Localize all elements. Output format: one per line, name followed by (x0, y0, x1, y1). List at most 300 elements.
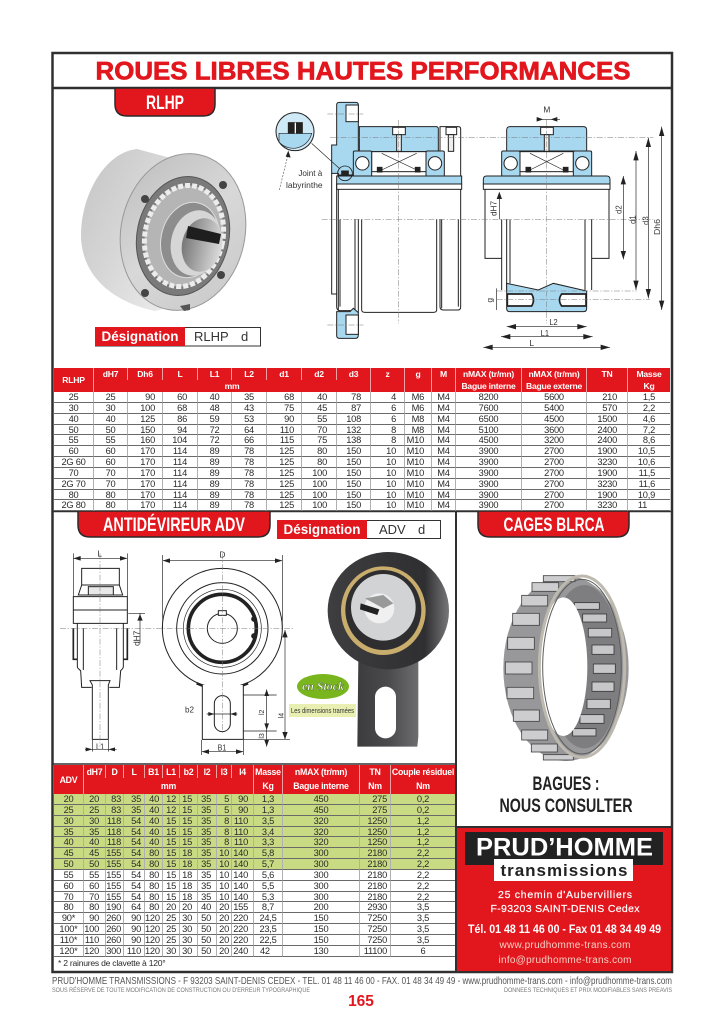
front view (162, 568, 282, 739)
ADV dimensions: l4 (278, 713, 285, 718)
table: RLHP dimensions: mm (225, 381, 239, 391)
table: ADV dimensions: 3,5 (417, 924, 429, 934)
table: ADV dimensions: 50 (89, 859, 99, 869)
table: ADV dimensions: 15 (182, 794, 192, 804)
table: ADV dimensions: 2,2 (417, 859, 429, 869)
table: ADV dimensions: 2180 (367, 881, 387, 891)
table: RLHP dimensions: 170 (140, 468, 155, 478)
table: ADV dimensions: 15 (166, 848, 176, 858)
table: RLHP dimensions: M (440, 369, 447, 379)
table: RLHP dimensions: 80 (69, 490, 78, 500)
table: RLHP dimensions: M6 (412, 392, 424, 402)
table: ADV dimensions: 7250 (367, 924, 387, 934)
table: ADV dimensions: 155 (106, 881, 121, 891)
table: ADV dimensions: 55 (89, 870, 99, 880)
table: RLHP dimensions: M4 (437, 425, 450, 435)
table: ADV dimensions: 0,2 (417, 794, 429, 804)
table: ADV dimensions: 155 (233, 902, 248, 912)
table: ADV dimensions: 90 (89, 913, 99, 923)
table: RLHP dimensions: 40 (69, 414, 78, 424)
table: ADV dimensions: 120 (145, 924, 160, 934)
table: ADV dimensions: 5 (224, 805, 229, 815)
table: ADV dimensions: 7250 (367, 935, 387, 945)
table: ADV dimensions: 1,3 (262, 805, 274, 815)
table: RLHP dimensions: 115 (280, 435, 294, 445)
table: RLHP dimensions: d2 (314, 369, 324, 379)
table: ADV dimensions: 260 (106, 913, 121, 923)
table: RLHP dimensions: 89 (210, 490, 219, 500)
table: RLHP dimensions: 40 (106, 414, 115, 424)
table: ADV dimensions: 320 (314, 816, 328, 826)
table: RLHP dimensions: 10 (386, 468, 396, 478)
table: ADV dimensions: 40 (64, 837, 73, 847)
table: RLHP dimensions: 108 (346, 414, 361, 424)
table: ADV dimensions: 30 (89, 816, 99, 826)
table: RLHP dimensions: 55 (106, 435, 115, 445)
table: ADV dimensions: 3,5 (417, 935, 429, 945)
table: RLHP dimensions: 2G 70 (61, 479, 86, 489)
table: ADV dimensions: 15 (182, 805, 192, 815)
table: ADV dimensions: 30 (64, 816, 73, 826)
dimension arrows: d2 (613, 205, 623, 214)
table: ADV dimensions: 35 (201, 870, 211, 880)
table: ADV dimensions: 2180 (367, 859, 387, 869)
table: RLHP dimensions: 1,5 (643, 392, 655, 402)
table: ADV dimensions: 10 (219, 892, 229, 902)
table: RLHP dimensions: 5600 (544, 392, 564, 402)
table: ADV dimensions: 450 (314, 794, 328, 804)
table: RLHP dimensions: 170 (140, 500, 155, 510)
table: RLHP dimensions: 66 (244, 435, 254, 445)
table: RLHP dimensions: 68 (284, 392, 294, 402)
designation box: ADV d (277, 520, 440, 539)
table: ADV dimensions: 20 (166, 902, 176, 912)
table: ADV dimensions: 260 (106, 935, 121, 945)
table: RLHP dimensions: 2400 (597, 435, 617, 445)
table: ADV dimensions: l2 (204, 766, 210, 776)
table: ADV dimensions: 6 (421, 946, 425, 956)
table: ADV dimensions: 50 (201, 935, 211, 945)
table: ADV dimensions: 3,5 (417, 913, 429, 923)
table: ADV dimensions: 100* (59, 924, 78, 934)
table: RLHP dimensions: Bague interne (461, 381, 516, 391)
table: ADV dimensions: 110 (127, 946, 141, 956)
table: RLHP dimensions: 150 (346, 457, 361, 467)
ADV dimensions: b2 (185, 705, 194, 715)
table: ADV dimensions: 130 (314, 946, 328, 956)
table: RLHP dimensions: M4 (437, 414, 450, 424)
table: ADV dimensions: 22,5 (259, 935, 277, 945)
table: RLHP dimensions: 94 (177, 425, 187, 435)
table: RLHP dimensions: 48 (210, 403, 219, 413)
table: ADV dimensions (54, 765, 455, 968)
table: ADV dimensions: 450 (314, 805, 328, 815)
table: RLHP dimensions: 114 (173, 490, 187, 500)
table: RLHP dimensions: 89 (210, 446, 219, 456)
table: ADV dimensions: 15 (182, 816, 192, 826)
table: RLHP dimensions: 150 (346, 479, 361, 489)
table: ADV dimensions: 60 (64, 881, 73, 891)
table: ADV dimensions: 90 (238, 794, 248, 804)
table: RLHP dimensions: 78 (244, 457, 254, 467)
table: ADV dimensions: 275 (372, 805, 387, 815)
table: ADV dimensions: 140 (233, 892, 248, 902)
designation box: RLHP d: Désignation (102, 329, 178, 344)
table: ADV dimensions: 80 (149, 902, 159, 912)
table: RLHP dimensions: 80 (106, 490, 115, 500)
table: ADV dimensions: 90 (131, 913, 141, 923)
table: RLHP dimensions: 90 (284, 414, 294, 424)
table: ADV dimensions: 30 (166, 946, 176, 956)
table: RLHP dimensions: Masse (636, 369, 662, 379)
table: RLHP dimensions: 59 (210, 414, 219, 424)
table: ADV dimensions: ADV (60, 774, 77, 784)
table: ADV dimensions: 90 (131, 924, 141, 934)
table: ADV dimensions: 10 (219, 870, 229, 880)
table: ADV dimensions: 20 (182, 902, 192, 912)
table: ADV dimensions: 40 (149, 794, 159, 804)
table: ADV dimensions: 18 (182, 859, 192, 869)
table: ADV dimensions: 155 (106, 870, 121, 880)
table: ADV dimensions: * 2 rainures de clavette à 120° (58, 958, 165, 968)
table: ADV dimensions: 60 (89, 881, 99, 891)
table: ADV dimensions: 24,5 (259, 913, 277, 923)
table: RLHP dimensions: 7600 (479, 403, 498, 413)
table: RLHP dimensions: g (416, 369, 420, 379)
table: ADV dimensions: 70 (64, 892, 73, 902)
table: ADV dimensions: l4 (239, 766, 246, 776)
table: ADV dimensions: 1250 (367, 837, 387, 847)
designation box: RLHP d: RLHP (194, 329, 229, 344)
table: ADV dimensions: 2180 (367, 848, 387, 858)
table: RLHP dimensions: 11,5 (639, 468, 655, 478)
table: RLHP dimensions: 110 (280, 425, 294, 435)
table: ADV dimensions: 40 (149, 827, 159, 837)
address: F-93203 SAINT-DENIS Cedex (490, 903, 640, 915)
footer: right disclaimer: DONNEES TECHNIQUES ET PRIX MODIFIABLES SANS PREAVIS (504, 987, 673, 994)
table: RLHP dimensions: Bague externe (526, 381, 582, 391)
table: RLHP dimensions: 3230 (597, 457, 617, 467)
designation box: ADV d: Désignation (284, 522, 360, 537)
table: ADV dimensions: 150 (314, 924, 328, 934)
photo: BLRCA sprag cage (503, 576, 629, 761)
table: RLHP dimensions: 72 (210, 425, 219, 435)
ADV dimensions: B1 (218, 743, 227, 753)
table: ADV dimensions: 30 (182, 946, 192, 956)
table: RLHP dimensions: M4 (437, 392, 450, 402)
table: ADV dimensions: 11100 (364, 946, 387, 956)
table: RLHP dimensions: 87 (351, 403, 361, 413)
table: ADV dimensions: 40 (201, 902, 211, 912)
table: ADV dimensions: mm (161, 781, 176, 791)
tab: ANTIDÉVIREUR ADV: ANTIDÉVIREUR ADV (103, 514, 245, 536)
table: ADV dimensions: 300 (106, 946, 121, 956)
table: RLHP dimensions: 10 (386, 479, 396, 489)
contact details: www.prudhomme-trans.com (498, 940, 630, 951)
page number: 165 (348, 993, 374, 1010)
table: ADV dimensions: 2,2 (417, 848, 429, 858)
table: ADV dimensions: 54 (131, 859, 141, 869)
table: RLHP dimensions: 210 (602, 392, 617, 402)
ADV dimensions: L1 (96, 741, 105, 751)
detail callout: labyrinth seal: labyrinthe (286, 180, 323, 190)
table: RLHP dimensions: 78 (244, 468, 254, 478)
table: RLHP dimensions: 3900 (479, 490, 498, 500)
table: ADV dimensions: 155 (106, 848, 121, 858)
table: RLHP dimensions: 75 (317, 435, 327, 445)
table: RLHP dimensions: 89 (210, 457, 219, 467)
table: RLHP dimensions: 170 (140, 457, 155, 467)
table: RLHP dimensions: 8200 (479, 392, 498, 402)
table: RLHP dimensions: 50 (69, 425, 78, 435)
table: RLHP dimensions: 3900 (479, 479, 498, 489)
dimension arrows (483, 105, 664, 350)
ADV dimensions: dH7 (131, 630, 141, 646)
table: ADV dimensions: Couple résiduel (392, 766, 454, 776)
table: ADV dimensions: 30 (182, 935, 192, 945)
photo: ADV backstop (328, 552, 449, 747)
table: RLHP dimensions: 75 (284, 403, 294, 413)
logo: Prud'homme transmissions: PRUD’HOMME (476, 834, 653, 862)
table: RLHP dimensions: 4500 (544, 414, 564, 424)
table: RLHP dimensions: 11,6 (639, 479, 655, 489)
table: ADV dimensions: 155 (106, 892, 121, 902)
table: ADV dimensions: 15 (166, 837, 176, 847)
table: ADV dimensions: 2,2 (417, 892, 429, 902)
table: ADV dimensions: 155 (106, 859, 121, 869)
table: RLHP dimensions: 114 (173, 479, 187, 489)
table: ADV dimensions: 80 (64, 902, 73, 912)
table: RLHP dimensions: 40 (210, 392, 219, 402)
table: ADV dimensions: 120 (84, 946, 99, 956)
panel: company contact (456, 827, 672, 972)
table: ADV dimensions: 110* (60, 935, 77, 945)
table: ADV dimensions: 260 (106, 924, 121, 934)
table: RLHP dimensions: M4 (437, 468, 450, 478)
table: RLHP dimensions: 30 (69, 403, 78, 413)
table: RLHP dimensions: M6 (412, 403, 424, 413)
table: ADV dimensions: 5,8 (262, 848, 274, 858)
dimension arrows: Dh6 (652, 219, 662, 235)
table: ADV dimensions: 120 (145, 946, 160, 956)
table: ADV dimensions: 140 (233, 870, 248, 880)
table: ADV dimensions: 35 (131, 794, 141, 804)
table: RLHP dimensions: 78 (244, 500, 254, 510)
table: ADV dimensions: 35 (201, 892, 211, 902)
contact details (468, 922, 661, 966)
table: RLHP dimensions: 80 (106, 500, 115, 510)
dimension arrows: dH7 (489, 201, 499, 216)
table: ADV dimensions: 1,2 (417, 816, 429, 826)
table: RLHP dimensions: 6 (391, 414, 396, 424)
table: ADV dimensions: 120 (145, 913, 160, 923)
table: RLHP dimensions: 125 (279, 479, 294, 489)
table: RLHP dimensions: 150 (346, 490, 361, 500)
table: ADV dimensions: 8 (224, 827, 229, 837)
table: ADV dimensions: 7250 (367, 913, 387, 923)
table: ADV dimensions: 80 (149, 881, 159, 891)
table: ADV dimensions: 20 (219, 935, 229, 945)
table: RLHP dimensions: 8,6 (643, 435, 655, 445)
table: RLHP dimensions: 7,2 (643, 425, 655, 435)
table: ADV dimensions: 300 (314, 848, 328, 858)
tab: CAGES BLRCA (478, 511, 629, 537)
table: ADV dimensions: 8 (224, 837, 229, 847)
table: RLHP dimensions: 43 (244, 403, 254, 413)
table: ADV dimensions: 5,6 (262, 870, 274, 880)
table: ADV dimensions: 25 (64, 805, 73, 815)
photo: RLHP freewheel (81, 142, 260, 322)
table: RLHP dimensions: 170 (140, 490, 155, 500)
table: ADV dimensions: 50 (201, 913, 211, 923)
table: ADV dimensions: 35 (201, 881, 211, 891)
ADV dimensions: l3 (259, 733, 266, 739)
logo: Prud'homme transmissions: transmissions (500, 861, 628, 880)
table: ADV dimensions: 20 (219, 924, 229, 934)
center lines (322, 114, 653, 325)
table: RLHP dimensions: 60 (106, 457, 115, 467)
table: ADV dimensions: 0,2 (417, 805, 429, 815)
table: RLHP dimensions: 64 (244, 425, 254, 435)
section with dimensions (483, 127, 610, 312)
table: ADV dimensions: 42 (260, 946, 270, 956)
table: ADV dimensions: 80 (149, 848, 159, 858)
table: RLHP dimensions: 100 (312, 490, 327, 500)
table: ADV dimensions: 8 (224, 816, 229, 826)
table: ADV dimensions: 300 (314, 859, 328, 869)
table: RLHP dimensions: 10,6 (638, 457, 655, 467)
table: RLHP dimensions: Kg (644, 381, 654, 391)
table: RLHP dimensions: 3900 (479, 500, 498, 510)
table: RLHP dimensions: 150 (140, 425, 155, 435)
table: RLHP dimensions: 125 (279, 446, 294, 456)
table: RLHP dimensions: 45 (317, 403, 327, 413)
table: ADV dimensions: 30 (182, 913, 192, 923)
table: ADV dimensions: 40 (89, 837, 99, 847)
table: RLHP dimensions: 11 (638, 500, 647, 510)
table: ADV dimensions: 12 (166, 805, 176, 815)
table: ADV dimensions: 5,5 (262, 881, 274, 891)
table: ADV dimensions: 35 (64, 827, 73, 837)
table: RLHP dimensions: 6500 (479, 414, 498, 424)
table: RLHP dimensions: 125 (279, 490, 294, 500)
table: ADV dimensions: 118 (107, 827, 121, 837)
table: RLHP dimensions: nMAX (tr/mn) (529, 369, 579, 379)
table: RLHP dimensions: 80 (317, 457, 327, 467)
table: RLHP dimensions: 60 (69, 446, 78, 456)
table: RLHP dimensions: M10 (407, 468, 424, 478)
note: shaded dimensions (289, 704, 356, 717)
table: ADV dimensions: 1250 (367, 827, 387, 837)
table: ADV dimensions: 80 (149, 870, 159, 880)
table: RLHP dimensions: 10,5 (638, 446, 655, 456)
table: ADV dimensions: 200 (314, 902, 328, 912)
table: RLHP dimensions: 3900 (479, 468, 498, 478)
table: ADV dimensions: 35 (201, 794, 211, 804)
table: RLHP dimensions: 78 (244, 479, 254, 489)
table: ADV dimensions: 1,2 (417, 837, 429, 847)
table: RLHP dimensions: M4 (437, 490, 450, 500)
table: RLHP dimensions: d1 (279, 369, 289, 379)
table: ADV dimensions: 80 (149, 892, 159, 902)
designation box: ADV d: d (418, 522, 425, 537)
table: RLHP dimensions: 2700 (544, 479, 564, 489)
dimension arrows: g (485, 298, 495, 303)
table: RLHP dimensions: 138 (346, 435, 361, 445)
table: RLHP dimensions: 2700 (544, 446, 564, 456)
designation box: RLHP d (95, 327, 260, 346)
table: ADV dimensions: Kg (262, 781, 274, 791)
table: RLHP dimensions: 25 (69, 392, 78, 402)
table: RLHP dimensions: 114 (173, 500, 187, 510)
text: rings on request (500, 774, 633, 817)
table: RLHP dimensions: 100 (312, 468, 327, 478)
table: RLHP dimensions: 150 (346, 446, 361, 456)
dimension arrows: d3 (640, 216, 650, 225)
table: RLHP dimensions: L1 (210, 369, 219, 379)
table: ADV dimensions: 2,2 (417, 870, 429, 880)
table: RLHP dimensions: M10 (407, 435, 424, 445)
table: ADV dimensions: 275 (372, 794, 387, 804)
table: RLHP dimensions: 8 (391, 425, 396, 435)
table: RLHP dimensions: 150 (346, 468, 361, 478)
table: RLHP dimensions: 78 (351, 392, 361, 402)
tab: ANTIDÉVIREUR ADV (78, 511, 270, 537)
table: RLHP dimensions (54, 368, 670, 511)
table: ADV dimensions: 2,2 (417, 881, 429, 891)
table: RLHP dimensions: 2700 (544, 490, 564, 500)
table: RLHP dimensions: 3900 (479, 446, 498, 456)
table: ADV dimensions: 15 (182, 827, 192, 837)
table: RLHP dimensions: 55 (69, 435, 78, 445)
table: ADV dimensions: 50 (201, 924, 211, 934)
table: ADV dimensions: 10 (219, 859, 229, 869)
technical drawing: RLHP sections (276, 102, 664, 350)
table: ADV dimensions: 20 (219, 913, 229, 923)
table: ADV dimensions: 90 (238, 805, 248, 815)
table: RLHP dimensions: 3230 (597, 500, 617, 510)
table: ADV dimensions: 90* (62, 913, 75, 923)
table: RLHP dimensions: L2 (244, 369, 254, 379)
table: RLHP dimensions: 125 (279, 468, 294, 478)
table: RLHP dimensions: 8 (391, 435, 396, 445)
ADV dimensions: L (97, 549, 102, 559)
dimension arrows: L (529, 338, 534, 348)
table: RLHP dimensions: 170 (140, 479, 155, 489)
table: RLHP dimensions: M10 (407, 490, 424, 500)
table: ADV dimensions: TN (369, 766, 381, 776)
table: ADV dimensions: 240 (233, 946, 248, 956)
table: RLHP dimensions: 114 (173, 446, 187, 456)
table: ADV dimensions: 18 (182, 892, 192, 902)
footer: left disclaimer: SOUS RÉSERVE DE TOUTE MODIFICATION DE CONSTRUCTION OU D'ERREUR TYPOGRAPHIQUE (52, 985, 311, 994)
table: RLHP dimensions: RLHP (62, 375, 85, 385)
ADV dimensions: D (219, 550, 225, 560)
table: ADV dimensions: 15 (182, 837, 192, 847)
table: ADV dimensions: 15 (166, 859, 176, 869)
table: ADV dimensions: 150 (314, 913, 328, 923)
table: ADV dimensions: 1250 (367, 816, 387, 826)
note: shaded dimensions: Les dimensions tramées (291, 708, 354, 715)
table: ADV dimensions: 3,5 (262, 816, 274, 826)
table: RLHP dimensions: 40 (317, 392, 327, 402)
table: ADV dimensions: 23,5 (259, 924, 277, 934)
table: ADV dimensions: 220 (233, 935, 248, 945)
table: RLHP dimensions: 3200 (544, 435, 564, 445)
table: ADV dimensions: 20 (219, 946, 229, 956)
detail callout: labyrinth seal: Joint à (298, 168, 323, 178)
table: ADV dimensions: 40 (149, 837, 159, 847)
